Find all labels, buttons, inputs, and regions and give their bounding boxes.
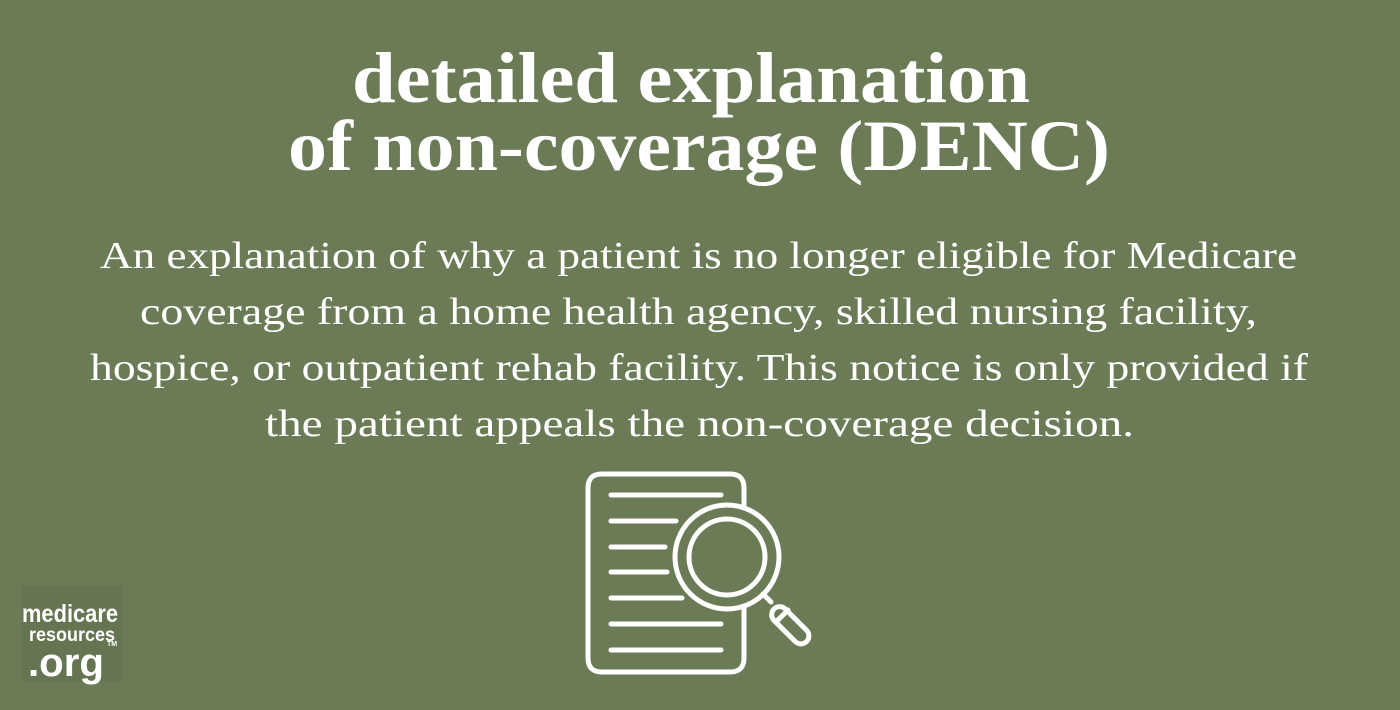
title: detailed explanation: [352, 38, 1030, 118]
title: of non-coverage (DENC): [288, 106, 1110, 186]
description text: [90, 235, 1308, 445]
logo: .org: [28, 641, 104, 685]
description text: hospice, or outpatient rehab facility. This notice is only provided if: [90, 347, 1308, 389]
logo: TM: [107, 641, 117, 648]
description text: the patient appeals the non-coverage decision.: [265, 403, 1134, 445]
icon: document with magnifier: [588, 474, 812, 672]
description text: coverage from a home health agency, skilled nursing facility,: [140, 291, 1257, 333]
logo: medicare: [22, 600, 118, 628]
logo: resources: [29, 625, 115, 646]
title: [288, 38, 1110, 186]
logo: [22, 586, 122, 685]
description text: An explanation of why a patient is no longer eligible for Medicare: [100, 235, 1297, 277]
